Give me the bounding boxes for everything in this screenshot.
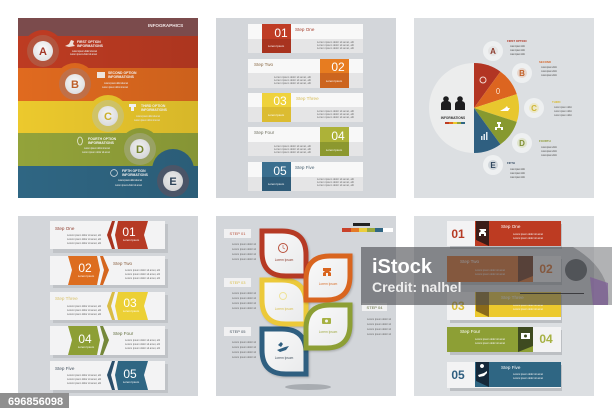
- marker E: [483, 155, 525, 179]
- chevron step 01: 01: [122, 225, 136, 239]
- step 05 card: Lorem Ipsum: [268, 182, 285, 186]
- step 02 card: Lorem ipsum dolor sit amet, elit: [274, 81, 311, 85]
- step 02 card: [248, 59, 363, 88]
- step 02 card: Step Two: [254, 62, 274, 67]
- step 05 card: [248, 162, 363, 191]
- band D: Lorem ipsum dolor sit amet: [82, 150, 110, 154]
- band E: Lorem ipsum dolor sit amet: [118, 178, 142, 182]
- ribbon step 02: Lorem ipsum dolor sit amet: [475, 268, 505, 272]
- step 03 label: Lorem ipsum dolor sit: [232, 306, 256, 310]
- marker B: SECOND: [539, 60, 551, 64]
- ribbon step 04: Lorem ipsum dolor sit amet: [475, 337, 505, 341]
- step 01 card: [248, 24, 363, 53]
- step 04 card: Lorem ipsum dolor sit amet, elit: [274, 147, 311, 151]
- ribbon step 01: Step One: [501, 224, 521, 229]
- chevron step 05: Lorem ipsum dolor sit amet, elit: [67, 381, 101, 385]
- leaf 5 blue: Lorem Ipsum: [275, 356, 294, 360]
- leaf 2 orange: [306, 256, 350, 300]
- step 04 label: Lorem ipsum dolor sit: [367, 327, 391, 331]
- step 05 label: STEP 05: [230, 329, 246, 334]
- step 03 label: Lorem ipsum dolor sit: [232, 296, 256, 300]
- ribbon step 04: [447, 327, 562, 355]
- band E: [18, 149, 198, 198]
- marker A: Lorem ipsum dolor: [510, 52, 525, 56]
- ribbon step 02: Step Two: [460, 259, 480, 264]
- band A: INFORMATIONS: [77, 44, 104, 48]
- panel: ribbon step cards: [414, 216, 594, 396]
- chevron step 02: Lorem Ipsum: [78, 274, 95, 278]
- marker E: E: [490, 161, 496, 170]
- chevron step 01: Lorem ipsum dolor sit amet, elit: [67, 237, 101, 241]
- chevron step 02: [50, 256, 168, 288]
- chevron step 04: Step Four: [113, 331, 134, 336]
- step 02 card: Lorem Ipsum: [326, 79, 343, 83]
- chevron step 04: Lorem ipsum dolor sit amet, elit: [125, 338, 160, 342]
- ribbon step 02: 02: [539, 262, 553, 276]
- step 04 card: Lorem Ipsum: [326, 148, 343, 152]
- marker D: [512, 133, 557, 157]
- step 03 card: Lorem ipsum dolor sit amet, elit: [317, 112, 354, 116]
- image id tag: 696856098: [8, 396, 63, 408]
- panel: banded ABCDE infographic: [18, 18, 198, 198]
- step 05 card: Step Five: [295, 165, 315, 170]
- leaf 2 orange: Lorem Ipsum: [319, 282, 338, 286]
- step 04 card: 04: [331, 129, 345, 143]
- image id tag: [0, 393, 69, 408]
- step 02 card: Lorem ipsum dolor sit amet, elit: [274, 78, 311, 82]
- panel: leaf diagram: [216, 216, 396, 396]
- leaf 4 green: Lorem Ipsum: [319, 330, 338, 334]
- chevron step 05: Lorem Ipsum: [123, 380, 140, 384]
- marker B: [512, 60, 557, 83]
- band A: A: [39, 46, 47, 58]
- chevron step 03: Lorem Ipsum: [123, 309, 140, 313]
- chevron step 05: Lorem ipsum dolor sit amet, elit: [67, 377, 101, 381]
- step 01 label: [224, 229, 256, 261]
- step 04 card: Lorem ipsum dolor sit amet, elit: [274, 150, 311, 154]
- step 05 label: Lorem ipsum dolor sit: [232, 345, 256, 349]
- band D: D: [136, 144, 144, 156]
- chevron step 01: [50, 221, 168, 253]
- step 01 label: Lorem ipsum dolor sit: [232, 242, 256, 246]
- step 02 card: 02: [331, 60, 345, 74]
- marker E: Lorem ipsum dolor: [510, 167, 525, 171]
- step 04 label: STEP 04: [367, 305, 383, 310]
- marker D: Lorem ipsum dolor: [541, 149, 557, 153]
- ribbon step 05: 05: [451, 368, 465, 382]
- band B: [18, 63, 198, 105]
- ribbon step 04: 04: [539, 332, 553, 346]
- leaf 4 green: [306, 305, 350, 348]
- marker E: Lorem ipsum dolor: [510, 175, 525, 179]
- marker A: [483, 39, 527, 61]
- step 03 card: 03: [273, 94, 287, 108]
- marker A: Lorem ipsum dolor: [510, 48, 525, 52]
- band C: INFORMATIONS: [141, 108, 168, 112]
- band A: FIRST OPTION: [77, 40, 101, 44]
- ribbon step 05: Step Five: [501, 365, 521, 370]
- band D: Lorem ipsum dolor sit amet: [84, 146, 110, 150]
- band D: [18, 128, 198, 170]
- step 01 card: 01: [274, 26, 288, 40]
- panel: pie infographic: [414, 18, 594, 198]
- marker A: A: [490, 47, 496, 56]
- step 03 card: Lorem ipsum dolor sit amet, elit: [317, 109, 354, 113]
- band D: INFORMATIONS: [88, 141, 115, 145]
- marker D: Lorem ipsum dolor: [541, 153, 557, 157]
- step 05 label: Lorem ipsum dolor sit: [232, 340, 256, 344]
- band B: INFORMATIONS: [108, 75, 135, 79]
- marker B: B: [519, 69, 525, 78]
- ribbon step 03: [447, 292, 562, 323]
- band B: SECOND OPTION: [108, 71, 137, 75]
- step 04 card: [248, 127, 363, 156]
- step 01 card: Lorem Ipsum: [268, 44, 285, 48]
- leaf 3 yellow: Lorem Ipsum: [275, 307, 294, 311]
- chevron step 02: Lorem ipsum dolor sit amet, elit: [125, 268, 160, 272]
- marker B: Lorem ipsum dolor: [541, 65, 557, 69]
- marker C: Lorem ipsum dolor: [554, 109, 572, 113]
- step 03 card: Step Three: [296, 96, 319, 101]
- step 04 label: Lorem ipsum dolor sit: [367, 322, 391, 326]
- leaf 1 red: Lorem Ipsum: [275, 258, 294, 262]
- pie chart: [429, 63, 519, 153]
- ribbon step 02: [447, 256, 562, 285]
- step 04 card: Lorem ipsum dolor sit amet, elit: [274, 144, 311, 148]
- step 05 label: [224, 327, 256, 359]
- band A: [18, 30, 198, 72]
- marker C: Lorem ipsum dolor: [554, 113, 572, 117]
- marker E: FIFTH: [507, 161, 515, 165]
- ribbon step 04: Step Four: [460, 329, 481, 334]
- step 01 card: Step One: [295, 27, 315, 32]
- chevron step 05: Lorem ipsum dolor sit amet, elit: [67, 373, 101, 377]
- step 01 label: STEP 01: [230, 231, 246, 236]
- band C: C: [104, 111, 112, 123]
- pie caption: INFORMATIONS: [441, 116, 465, 120]
- panel: chevron step cards: [18, 216, 198, 396]
- step 05 card: Lorem ipsum dolor sit amet, elit: [317, 183, 354, 187]
- marker E: Lorem ipsum dolor: [510, 171, 525, 175]
- chevron step 03: Lorem ipsum dolor sit amet, elit: [67, 308, 101, 312]
- band D: FOURTH OPTION: [88, 137, 117, 141]
- step 05 label: Lorem ipsum dolor sit: [232, 355, 256, 359]
- chevron step 04: Lorem ipsum dolor sit amet, elit: [125, 342, 160, 346]
- chevron step 03: Step Three: [55, 296, 78, 301]
- ribbon step 03: 03: [451, 299, 465, 313]
- band C: THIRD OPTION: [141, 104, 166, 108]
- step 01 label: Lorem ipsum dolor sit: [232, 252, 256, 256]
- ribbon step 04: Lorem ipsum dolor sit amet: [475, 341, 505, 345]
- chevron step 01: Step One: [55, 226, 75, 231]
- leaf 1 red: [262, 231, 306, 276]
- chevron step 05: [50, 361, 168, 393]
- step 03 card: Lorem ipsum dolor sit amet, elit: [317, 115, 354, 119]
- marker B: Lorem ipsum dolor: [541, 69, 557, 73]
- marker D: D: [519, 139, 525, 148]
- band B: Lorem ipsum dolor sit amet: [102, 85, 128, 89]
- chevron step 05: 05: [123, 367, 137, 381]
- chevron step 02: Step Two: [113, 261, 133, 266]
- band E: FIFTH OPTION: [122, 169, 146, 173]
- step 01 card: Lorem ipsum dolor sit amet, elit: [317, 46, 354, 50]
- marker C: THIRD: [552, 100, 561, 104]
- step 01 label: Lorem ipsum dolor sit: [232, 257, 256, 261]
- chevron step 05: Step Five: [55, 366, 75, 371]
- step 04 label: [362, 303, 391, 336]
- chevron step 03: [50, 292, 168, 323]
- band C: Lorem ipsum dolor sit amet: [136, 114, 160, 118]
- chevron step 03: 03: [123, 296, 137, 310]
- step 02 card: Lorem ipsum dolor sit amet, elit: [274, 75, 311, 79]
- band C: [18, 95, 198, 137]
- chevron step 03: Lorem ipsum dolor sit amet, elit: [67, 304, 101, 308]
- ribbon step 03: Lorem ipsum dolor sit amet: [513, 307, 543, 311]
- step 03 label: Lorem ipsum dolor sit: [232, 301, 256, 305]
- step 04 card: Step Four: [254, 130, 275, 135]
- band E: E: [169, 176, 177, 188]
- ribbon step 03: Step Three: [501, 295, 524, 300]
- step 01 card: Lorem ipsum dolor sit amet, elit: [317, 40, 354, 44]
- marker C: Lorem ipsum dolor: [554, 105, 572, 109]
- band E: Lorem ipsum dolor sit amet: [115, 183, 142, 187]
- ribbon step 01: Lorem ipsum dolor sit amet: [513, 232, 543, 236]
- chevron step 04: Lorem Ipsum: [78, 345, 95, 349]
- ribbon step 05: [447, 362, 562, 391]
- panel: numbered step cards: [216, 18, 396, 198]
- step 04 label: Lorem ipsum dolor sit: [367, 317, 391, 321]
- ribbon step 05: Lorem ipsum dolor sit amet: [513, 376, 543, 380]
- icon: two people: [441, 96, 465, 110]
- marker D: FOURTH: [539, 139, 551, 143]
- step 05 card: 05: [273, 164, 287, 178]
- step 03 label: Lorem ipsum dolor sit: [232, 291, 256, 295]
- chevron step 04: [50, 326, 168, 358]
- band E: INFORMATIONS: [122, 173, 149, 177]
- leaf 5 blue: [262, 329, 306, 374]
- step 03 card: Lorem Ipsum: [268, 113, 285, 117]
- pie caption: [441, 116, 465, 124]
- marker A: FIRST OPTION: [507, 39, 527, 43]
- marker B: Lorem ipsum dolor: [541, 73, 557, 77]
- ribbon step 03: Lorem ipsum dolor sit amet: [513, 303, 543, 307]
- chevron step 01: Lorem ipsum dolor sit amet, elit: [67, 241, 101, 245]
- watermark text: iStock: [372, 256, 433, 278]
- watermark band: [361, 247, 612, 305]
- ribbon step 01: [447, 221, 562, 249]
- watermark credit: Credit: nalhel: [372, 279, 461, 295]
- chevron step 02: Lorem ipsum dolor sit amet, elit: [125, 272, 160, 276]
- ribbon step 01: 01: [451, 227, 465, 241]
- band C: Lorem ipsum dolor sit amet: [134, 118, 160, 122]
- marker C: [524, 98, 572, 118]
- chevron step 02: 02: [78, 261, 92, 275]
- step 04 label: Lorem ipsum dolor sit: [367, 332, 391, 336]
- step 05 card: Lorem ipsum dolor sit amet, elit: [317, 177, 354, 181]
- legend colour bar: [342, 223, 393, 232]
- leaf shadow: [285, 384, 331, 390]
- step 03 label: [224, 278, 256, 310]
- heading: infographics: INFOGRAPHICS: [148, 23, 183, 28]
- chevron step 03: Lorem ipsum dolor sit amet, elit: [67, 312, 101, 316]
- chevron step 04: Lorem ipsum dolor sit amet, elit: [125, 346, 160, 350]
- marker A: Lorem ipsum dolor: [510, 44, 525, 48]
- leaf 3 yellow: [262, 280, 306, 324]
- step 03 label: STEP 03: [230, 280, 246, 285]
- band A: Lorem ipsum dolor sit amet: [72, 49, 97, 53]
- band B: Lorem ipsum dolor sit amet: [104, 81, 128, 85]
- band A: Lorem ipsum dolor sit amet: [70, 52, 97, 56]
- band B: B: [71, 79, 79, 91]
- ribbon step 05: Lorem ipsum dolor sit amet: [513, 372, 543, 376]
- chevron step 01: Lorem Ipsum: [123, 238, 140, 242]
- chevron step 02: Lorem ipsum dolor sit amet, elit: [125, 276, 160, 280]
- chevron step 01: Lorem ipsum dolor sit amet, elit: [67, 233, 101, 237]
- chevron step 04: 04: [78, 332, 92, 346]
- ribbon step 02: Lorem ipsum dolor sit amet: [475, 272, 505, 276]
- step 01 label: Lorem ipsum dolor sit: [232, 247, 256, 251]
- step 05 card: Lorem ipsum dolor sit amet, elit: [317, 180, 354, 184]
- ribbon step 01: Lorem ipsum dolor sit amet: [513, 236, 543, 240]
- step 01 card: Lorem ipsum dolor sit amet, elit: [317, 43, 354, 47]
- marker C: C: [531, 104, 537, 113]
- step 05 label: Lorem ipsum dolor sit: [232, 350, 256, 354]
- step 03 card: [248, 93, 363, 122]
- marker D: Lorem ipsum dolor: [541, 145, 557, 149]
